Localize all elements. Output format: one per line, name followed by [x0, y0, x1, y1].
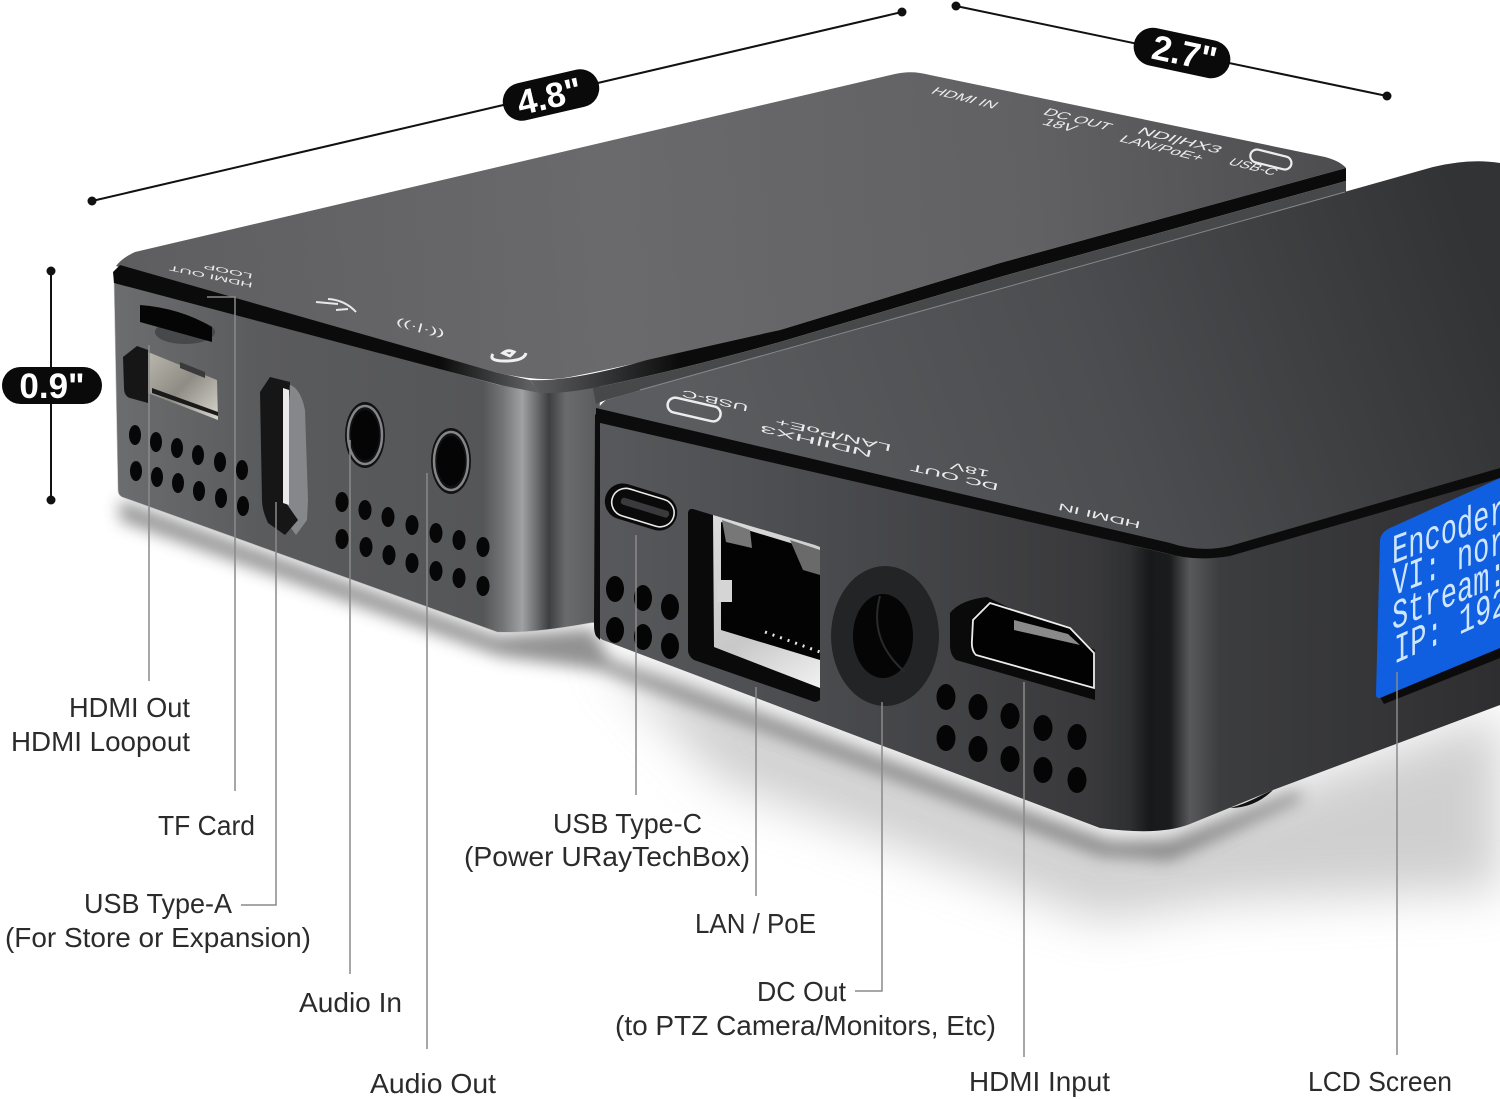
printed labels: DC OUT — [908, 461, 1000, 493]
dimension: height 0.9 inches — [2, 266, 102, 504]
printed labels far edge: 18V — [1039, 116, 1082, 134]
dimension: width 2.7 inches — [952, 2, 1392, 100]
side face with ports — [114, 280, 600, 632]
soft floor shadows — [120, 500, 1500, 920]
printed labels far edge: DC OUT — [1040, 106, 1116, 132]
printed labels: HDMI IN — [1057, 501, 1142, 531]
printed labels near edge: ((·|·)) — [395, 317, 446, 340]
black edge near side — [113, 265, 540, 393]
printed labels: 18V — [949, 460, 991, 480]
label: LAN / PoE: LAN / PoE — [695, 908, 816, 939]
printed labels far edge: HDMI IN — [928, 85, 1002, 111]
top face — [596, 161, 1500, 551]
dimension: width 2.7 inches: 2.7" — [1148, 28, 1220, 80]
label: USB Type-C: (Power URayTechBox) — [464, 841, 750, 872]
printed labels far edge — [928, 85, 1293, 178]
top face — [116, 72, 1346, 379]
HDMI out port — [123, 346, 218, 420]
label: TF Card: TF Card — [158, 810, 255, 841]
printed labels far edge: LAN/PoE+ — [1116, 133, 1209, 163]
printed labels near edge: HDMI OUT — [168, 263, 253, 288]
label: USB Type-A: (For Store or Expansion) — [5, 922, 311, 953]
LAN RJ45 port — [688, 509, 820, 702]
black edge long side — [530, 168, 1346, 393]
rubber foot — [1230, 790, 1273, 808]
label: USB Type-A — [5, 888, 311, 953]
printed labels near edge — [168, 262, 526, 361]
label: USB Type-C — [464, 808, 750, 872]
printed labels near edge: LOOP — [203, 262, 253, 279]
LCD screen — [1376, 478, 1500, 704]
label: DC Out: DC Out — [757, 976, 846, 1007]
label: Audio Out: Audio Out — [370, 1068, 496, 1099]
dimension: length 4.8 inches — [88, 8, 906, 206]
strip under long edge — [593, 181, 1346, 404]
audio out jack — [431, 428, 471, 494]
printed labels: NDI|HX3 — [758, 423, 874, 460]
side faces — [595, 420, 1500, 831]
vent holes right — [336, 492, 490, 596]
label: HDMI Out: HDMI Loopout — [11, 726, 190, 757]
audio in jack — [345, 402, 385, 468]
label: DC Out: (to PTZ Camera/Monitors, Etc) — [615, 1010, 996, 1041]
printed labels far edge: USB-C — [1225, 156, 1282, 178]
label: LCD Screen: LCD Screen — [1308, 1066, 1452, 1097]
label: HDMI Input: HDMI Input — [969, 1066, 1110, 1097]
vent holes left — [129, 425, 249, 516]
printed labels — [666, 387, 1142, 531]
dimension: length 4.8 inches: 4.8" — [513, 70, 586, 123]
vent holes left — [606, 576, 679, 659]
printed labels: LAN/PoE+ — [774, 416, 893, 454]
label: USB Type-A: USB Type-A — [84, 888, 232, 919]
printed labels: USB-C — [680, 387, 750, 414]
device: front encoder unit — [594, 161, 1500, 831]
label: Audio In: Audio In — [299, 987, 402, 1018]
label: HDMI Out: HDMI Out — [69, 692, 190, 723]
dimension: height 0.9 inches: 0.9" — [19, 367, 85, 406]
printed labels far edge: NDI|HX3 — [1134, 125, 1227, 155]
vent holes right — [936, 684, 1086, 793]
left black edge — [594, 414, 600, 640]
black edge — [596, 408, 1500, 558]
HDMI input port — [950, 597, 1095, 700]
label: DC Out — [615, 976, 996, 1041]
device: rear encoder unit — [113, 72, 1346, 632]
callout leader lines — [149, 297, 1397, 1057]
DC out jack — [831, 566, 939, 706]
light edge line — [640, 192, 1345, 390]
TF card slot — [140, 305, 215, 344]
USB type-C port — [600, 479, 682, 535]
label: HDMI Out — [11, 692, 190, 757]
label: USB Type-C: USB Type-C — [553, 808, 702, 839]
USB type-A port — [260, 377, 308, 535]
